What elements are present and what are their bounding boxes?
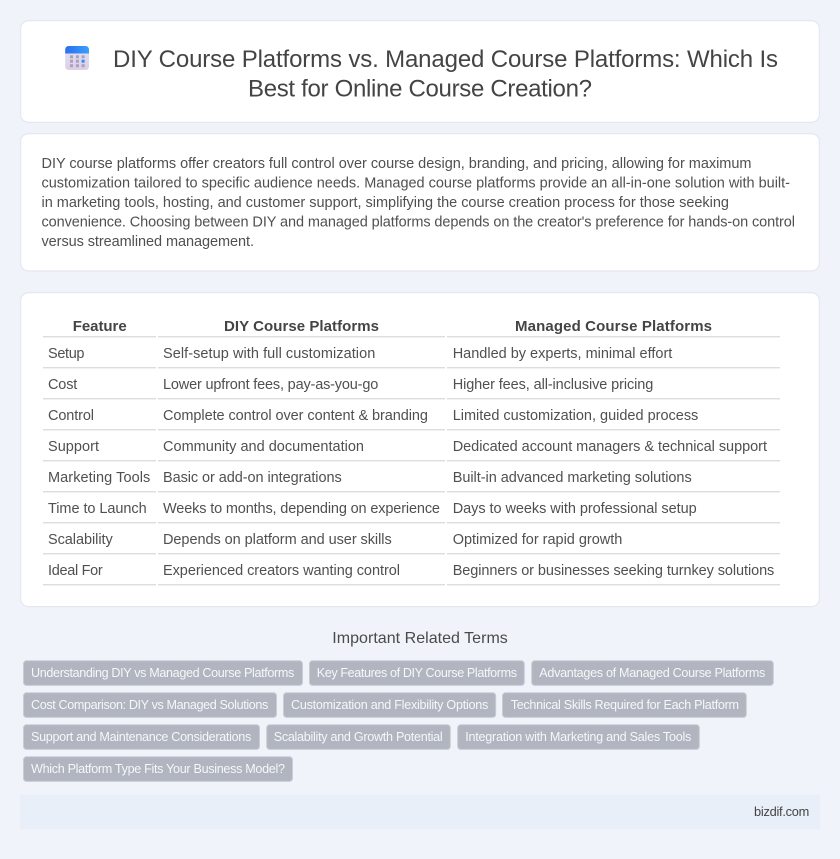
- row: ideal for: Experienced creators wanting control: [163, 563, 400, 579]
- table header: Managed Course Platforms: [515, 318, 712, 335]
- tag: Understanding DIY vs Managed Course Platforms: [31, 666, 294, 680]
- table header: Feature: [73, 318, 127, 335]
- tag: [310, 661, 524, 685]
- panel: introduction: [21, 134, 819, 271]
- row: support: [48, 439, 767, 455]
- row: support: Dedicated account managers & technical support: [453, 439, 767, 455]
- row: cost: Cost: [48, 377, 77, 393]
- table header: DIY Course Platforms: [224, 318, 379, 335]
- icon: calendar: [65, 46, 89, 70]
- row: time to launch: Weeks to months, depending on experience: [163, 501, 440, 517]
- title: [113, 46, 778, 102]
- row: setup: Handled by experts, minimal effort: [453, 346, 672, 362]
- row: control: Control: [48, 408, 94, 424]
- row: setup: [48, 346, 672, 362]
- tag: Technical Skills Required for Each Platform: [511, 698, 739, 712]
- row: ideal for: Beginners or businesses seeking turnkey solutions: [453, 563, 774, 579]
- table header: [73, 318, 712, 335]
- tag: [267, 725, 450, 749]
- row: setup: Self-setup with full customization: [163, 346, 375, 362]
- row: support: Support: [48, 439, 99, 455]
- row: cost: Higher fees, all-inclusive pricing: [453, 377, 653, 393]
- tag: [24, 757, 292, 781]
- row: marketing tools: Built-in advanced marketing solutions: [453, 470, 692, 486]
- text block: intro paragraph: DIY course platforms offer creators full control over course design, branding, and pricing, allowing for maximum: [42, 156, 752, 172]
- row: time to launch: Days to weeks with professional setup: [453, 501, 697, 517]
- text block: intro paragraph: in marketing tools, hosting, and customer support, simplifying the course creation process for those seeking: [42, 195, 729, 211]
- row: ideal for: [48, 563, 774, 579]
- tag: Integration with Marketing and Sales Tools: [465, 730, 691, 744]
- tag: [284, 693, 496, 717]
- title: Best for Online Course Creation?: [248, 76, 592, 102]
- text block: intro paragraph: [42, 156, 795, 250]
- footer: bizdif.com: [754, 804, 809, 819]
- row: time to launch: [48, 501, 697, 517]
- text block: intro paragraph: convenience. Choosing between DIY and managed platforms depends on the creator's preference for hands-on control: [42, 214, 795, 230]
- row: cost: Lower upfront fees, pay-as-you-go: [163, 377, 378, 393]
- row: scalability: [48, 532, 622, 548]
- tag: [24, 725, 260, 749]
- row: scalability: Optimized for rapid growth: [453, 532, 622, 548]
- panel: related term tags: [24, 661, 773, 781]
- row: scalability: Depends on platform and user skills: [163, 532, 392, 548]
- row: support: Community and documentation: [163, 439, 364, 455]
- text block: intro paragraph: versus streamlined management.: [42, 234, 254, 250]
- tag: Customization and Flexibility Options: [291, 698, 488, 712]
- row: marketing tools: [48, 470, 692, 486]
- title: DIY Course Platforms vs. Managed Course Platforms: Which Is: [113, 46, 778, 73]
- tag: Support and Maintenance Considerations: [31, 730, 251, 744]
- tag: Which Platform Type Fits Your Business Model?: [31, 762, 285, 776]
- row: cost: [48, 377, 653, 393]
- tag: Key Features of DIY Course Platforms: [317, 666, 517, 680]
- tag: [532, 661, 773, 685]
- row: marketing tools: Marketing Tools: [48, 470, 150, 486]
- row: ideal for: Ideal For: [48, 563, 103, 579]
- panel: comparison table: [21, 293, 819, 607]
- row: control: Complete control over content & branding: [163, 408, 428, 424]
- text block: intro paragraph: customization tailored to specific audience needs. Managed course platforms provide an all-in-one solution with built-: [42, 176, 790, 192]
- heading: important related terms: Important Related Terms: [332, 630, 508, 647]
- tag: [502, 693, 746, 717]
- row: scalability: Scalability: [48, 532, 113, 548]
- tag: Cost Comparison: DIY vs Managed Solutions: [31, 698, 268, 712]
- tag: [458, 725, 699, 749]
- tag: Scalability and Growth Potential: [274, 730, 443, 744]
- footer: [20, 795, 820, 829]
- row: time to launch: Time to Launch: [48, 501, 147, 517]
- panel: title card: [21, 21, 819, 122]
- row: setup: Setup: [48, 346, 84, 362]
- row: marketing tools: Basic or add-on integrations: [163, 470, 342, 486]
- tag: [24, 693, 276, 717]
- row: control: Limited customization, guided process: [453, 408, 698, 424]
- tag: Advantages of Managed Course Platforms: [539, 666, 765, 680]
- row: control: [48, 408, 698, 424]
- tag: [24, 661, 302, 685]
